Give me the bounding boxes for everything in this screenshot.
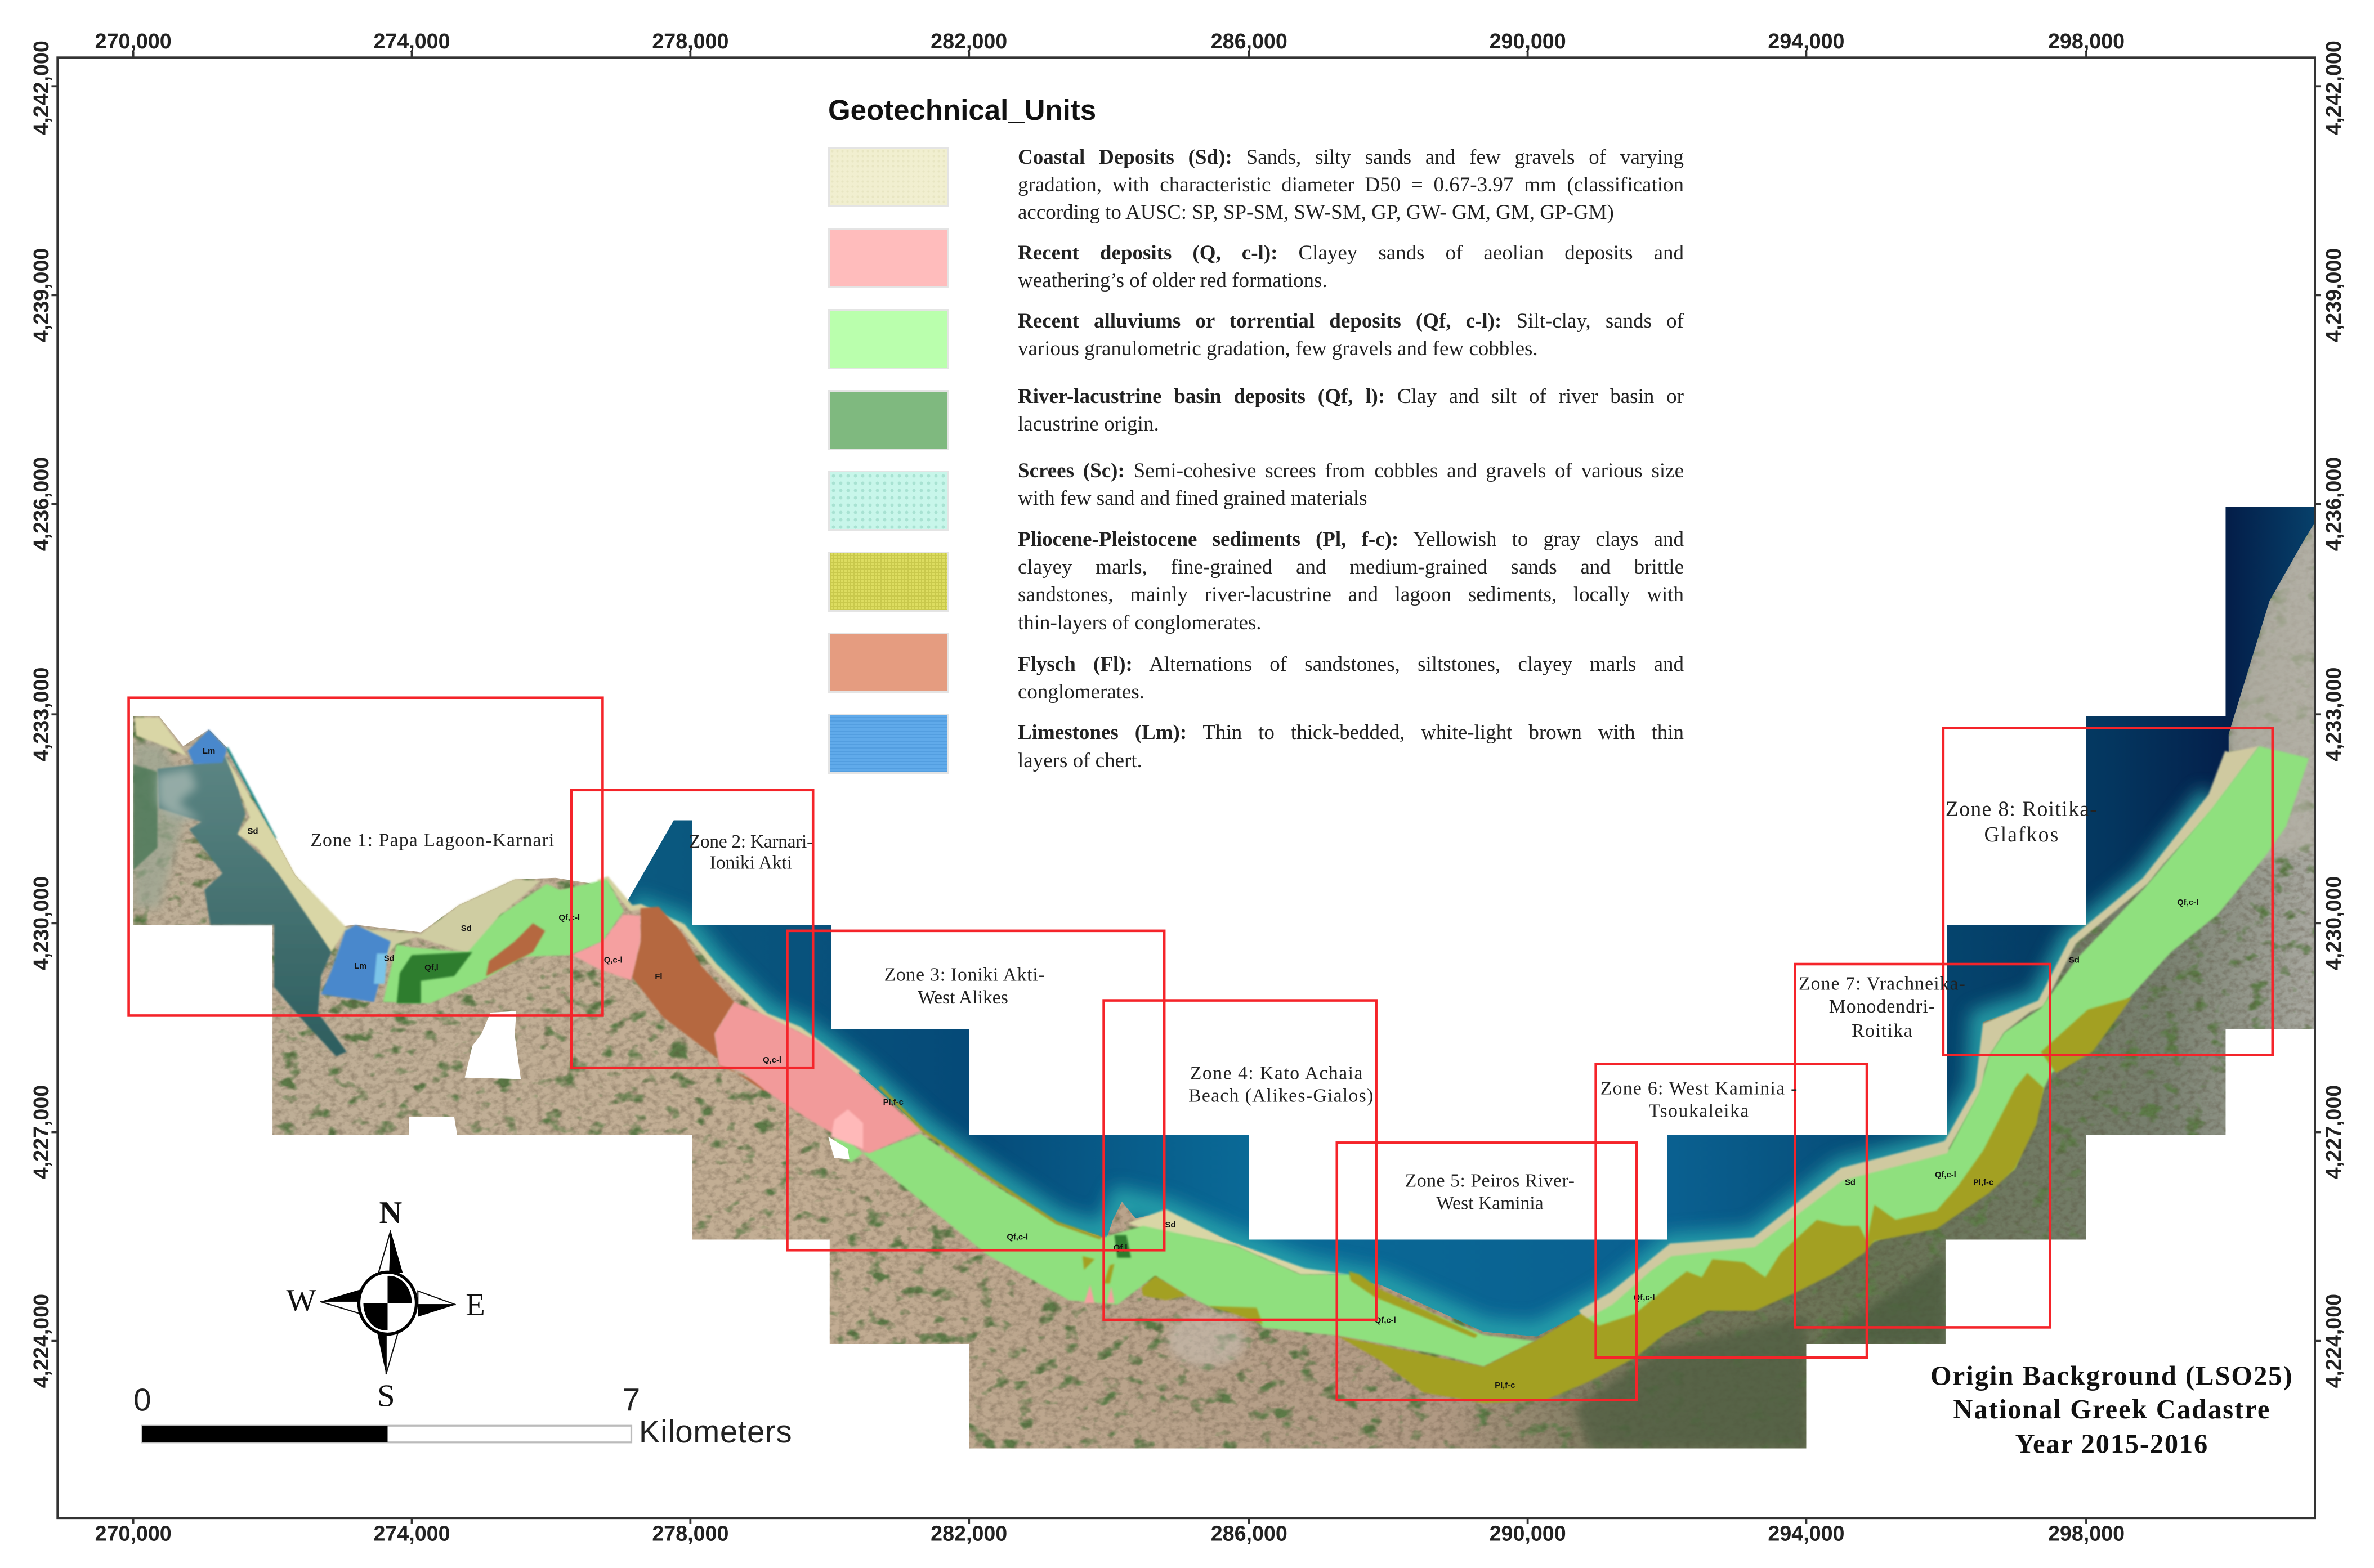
origin background credit: National Greek Cadastre	[1953, 1395, 2269, 1424]
tiny unit labels: Qf,c-l	[1935, 1171, 1956, 1180]
left axis labels: 4,224,000	[29, 1294, 53, 1388]
zone labels: Roitika	[1852, 1020, 1912, 1041]
bottom axis labels: 274,000	[373, 1522, 450, 1545]
bottom axis labels: 270,000	[95, 1522, 172, 1545]
recent alluviums text: various granulometric gradation, few gravels and few cobbles.	[1018, 337, 1538, 360]
top axis labels: 278,000	[652, 29, 728, 53]
top axis labels: 282,000	[931, 29, 1007, 53]
swatch: river-lacustrine	[828, 390, 949, 450]
left axis labels	[29, 41, 53, 1388]
right axis labels: 4,239,000	[2322, 248, 2345, 342]
compass rose: E	[466, 1288, 485, 1323]
right axis labels	[2322, 41, 2345, 1388]
tiny unit labels: Qf,l	[1114, 1243, 1127, 1252]
zone labels: Beach (Alikes-Gialos)	[1188, 1086, 1373, 1106]
bottom axis labels: 290,000	[1490, 1522, 1566, 1545]
pliocene-pleistocene text: Pliocene-Pleistocene sediments (Pl, f-c): Yellowish to gray clays and	[1018, 528, 1684, 551]
flysch text: conglomerates.	[1018, 680, 1144, 704]
coastal deposits text: gradation, with characteristic diameter D50 = 0.67-3.97 mm (classification	[1018, 173, 1684, 196]
screes text	[1018, 459, 1684, 510]
right axis labels: 4,242,000	[2322, 41, 2345, 135]
top axis labels: 286,000	[1211, 29, 1287, 53]
tiny unit labels: Pl,f-c	[883, 1098, 904, 1107]
right axis labels: 4,224,000	[2322, 1294, 2345, 1388]
bottom axis labels: 286,000	[1211, 1522, 1287, 1545]
bottom axis labels	[95, 1522, 2125, 1545]
swatch: flysch	[828, 633, 949, 693]
tiny unit labels: Sd	[384, 955, 395, 964]
pliocene-pleistocene text: thin-layers of conglomerates.	[1018, 611, 1262, 634]
right axis labels: 4,230,000	[2322, 876, 2345, 970]
coastal deposits text: Coastal Deposits (Sd): Sands, silty sands and few gravels of varying	[1018, 146, 1684, 169]
tiny unit labels: Qf,l	[424, 964, 439, 973]
left axis labels: 4,233,000	[29, 667, 53, 761]
recent alluviums text	[1018, 310, 1684, 360]
screes text: Screes (Sc): Semi-cohesive screes from cobbles and gravels of various size	[1018, 459, 1684, 482]
zone labels: Zone 4: Kato Achaia	[1190, 1063, 1363, 1083]
flysch text	[1018, 653, 1684, 704]
swatch: recent alluviums	[828, 309, 949, 369]
recent alluviums text: Recent alluviums or torrential deposits (Qf, c-l): Silt-clay, sands of	[1018, 310, 1684, 333]
top axis labels	[95, 29, 2125, 53]
river-lacustrine basin deposits (Qf, l)	[397, 952, 1131, 1258]
left axis labels: 4,230,000	[29, 876, 53, 970]
tiny unit labels: Qf,c-l	[1375, 1316, 1396, 1325]
legend title: Geotechnical_Units	[828, 94, 1096, 126]
origin background credit: Origin Background (LSO25)	[1930, 1361, 2292, 1391]
legend descriptions	[1018, 146, 1684, 772]
top axis labels: 290,000	[1490, 29, 1566, 53]
zone labels	[310, 797, 2097, 1214]
tiny unit labels: Sd	[1845, 1179, 1856, 1188]
zone labels: West Alikes	[918, 987, 1008, 1008]
zone labels: Zone 2: Karnari-	[689, 831, 813, 852]
swatch: screes	[828, 471, 949, 531]
flysch (Fl)	[486, 907, 766, 1091]
compass rose: W	[287, 1283, 317, 1318]
zone labels: Monodendri-	[1829, 996, 1935, 1017]
river-lacustrine text: River-lacustrine basin deposits (Qf, l): Clay and silt of river basin or	[1018, 385, 1684, 408]
swatch: recent deposits	[828, 228, 949, 288]
swatch: coastal deposits	[828, 147, 949, 207]
compass rose	[287, 1195, 485, 1413]
tiny unit labels: Q,c-l	[763, 1056, 781, 1065]
tiny unit labels: Pl,f-c	[1973, 1179, 1993, 1188]
origin background credit	[1930, 1361, 2292, 1459]
bottom axis labels: 298,000	[2048, 1522, 2125, 1545]
lagoon	[158, 747, 347, 1056]
limestones text	[1018, 721, 1684, 772]
zone labels: Zone 6: West Kaminia -	[1600, 1078, 1797, 1099]
coastal deposits text	[1018, 146, 1684, 224]
compass rose: N	[379, 1195, 402, 1230]
left axis labels: 4,227,000	[29, 1085, 53, 1179]
satellite land mosaic	[121, 499, 2332, 1468]
zone boxes	[129, 698, 2273, 1400]
compass rose: S	[377, 1378, 395, 1413]
tiny unit labels: Q,c-l	[604, 956, 623, 965]
tiny unit labels: Qf,c-l	[1634, 1293, 1655, 1302]
tiny unit labels: Qf,c-l	[1007, 1233, 1028, 1242]
zone labels: Zone 7: Vrachneika-	[1799, 974, 1965, 994]
swatch: limestones	[828, 714, 949, 774]
pliocene-pleistocene text: clayey marls, fine-grained and medium-grained sands and brittle	[1018, 555, 1684, 579]
scale bar: Kilometers	[639, 1414, 792, 1449]
tiny unit labels: Sd	[461, 924, 472, 933]
coastal deposits (Sd)	[135, 718, 2259, 1332]
legend swatches	[828, 147, 949, 774]
zone labels: Glafkos	[1984, 823, 2058, 846]
white mosaic gap	[465, 1011, 521, 1079]
zone labels: Zone 1: Papa Lagoon-Karnari	[310, 830, 554, 850]
tiny unit labels: Sd	[248, 827, 258, 836]
right axis labels: 4,233,000	[2322, 667, 2345, 761]
origin background credit: Year 2015-2016	[2015, 1430, 2207, 1459]
pliocene-pleistocene sediments (Pl, f-c)	[880, 997, 2132, 1403]
zone labels: Tsoukaleika	[1649, 1101, 1749, 1122]
recent deposits text: weathering’s of older red formations.	[1018, 269, 1327, 292]
tiny unit labels: Qf,c-l	[2177, 898, 2198, 907]
right axis labels: 4,227,000	[2322, 1085, 2345, 1179]
screes text: with few sand and fined grained materials	[1018, 487, 1367, 510]
limestones (Lm)	[187, 729, 391, 1002]
bottom axis labels: 282,000	[931, 1522, 1007, 1545]
scale bar: 7	[623, 1382, 640, 1417]
zone labels: Ioniki Akti	[710, 853, 792, 873]
tiny unit labels: Sd	[1165, 1221, 1175, 1230]
recent deposits text: Recent deposits (Q, c-l): Clayey sands of aeolian deposits and	[1018, 241, 1684, 265]
flysch text: Flysch (Fl): Alternations of sandstones, siltstones, clayey marls and	[1018, 653, 1684, 676]
top axis labels: 270,000	[95, 29, 172, 53]
river-lacustrine text	[1018, 385, 1684, 436]
scale bar	[133, 1382, 792, 1449]
tiny unit labels: Lm	[203, 747, 215, 756]
bottom axis labels: 278,000	[652, 1522, 728, 1545]
pliocene-pleistocene text: sandstones, mainly river-lacustrine and lagoon sediments, locally with	[1018, 583, 1684, 606]
coastal deposits text: according to AUSC: SP, SP-SM, SW-SM, GP, GW- GM, GM, GP-GM)	[1018, 201, 1614, 224]
tiny unit labels: Pl,f-c	[1495, 1381, 1515, 1390]
scale bar: 0	[133, 1382, 151, 1417]
left axis labels: 4,242,000	[29, 41, 53, 135]
recent deposits text	[1018, 241, 1684, 292]
tiny unit labels	[203, 747, 2198, 1390]
zone labels: Zone 3: Ioniki Akti-	[884, 965, 1045, 985]
top axis labels: 298,000	[2048, 29, 2125, 53]
tiny unit labels: Sd	[2069, 956, 2080, 965]
top axis labels: 294,000	[1768, 29, 1845, 53]
bottom axis labels: 294,000	[1768, 1522, 1845, 1545]
left axis labels: 4,236,000	[29, 457, 53, 551]
top axis labels: 274,000	[373, 29, 450, 53]
tiny unit labels: Lm	[354, 962, 366, 971]
zone labels: Zone 8: Roitika-	[1946, 797, 2097, 821]
swatch: pliocene-pleistocene	[828, 552, 949, 612]
white mosaic gap small	[828, 1137, 850, 1159]
tiny unit labels: Qf,c-l	[558, 913, 580, 922]
recent alluviums (Qf, c-l)	[383, 746, 2309, 1367]
left axis labels: 4,239,000	[29, 248, 53, 342]
zone labels: West Kaminia	[1436, 1193, 1544, 1214]
recent deposits (Q, c-l)	[573, 914, 1114, 1303]
satellite sea	[621, 499, 2324, 1347]
tiny unit labels: Fl	[655, 973, 662, 982]
limestones text: layers of chert.	[1018, 749, 1142, 772]
right axis labels: 4,236,000	[2322, 457, 2345, 551]
river-lacustrine text: lacustrine origin.	[1018, 413, 1159, 436]
limestones text: Limestones (Lm): Thin to thick-bedded, white-light brown with thin	[1018, 721, 1684, 744]
pliocene-pleistocene text	[1018, 528, 1684, 634]
zone labels: Zone 5: Peiros River-	[1405, 1170, 1575, 1191]
